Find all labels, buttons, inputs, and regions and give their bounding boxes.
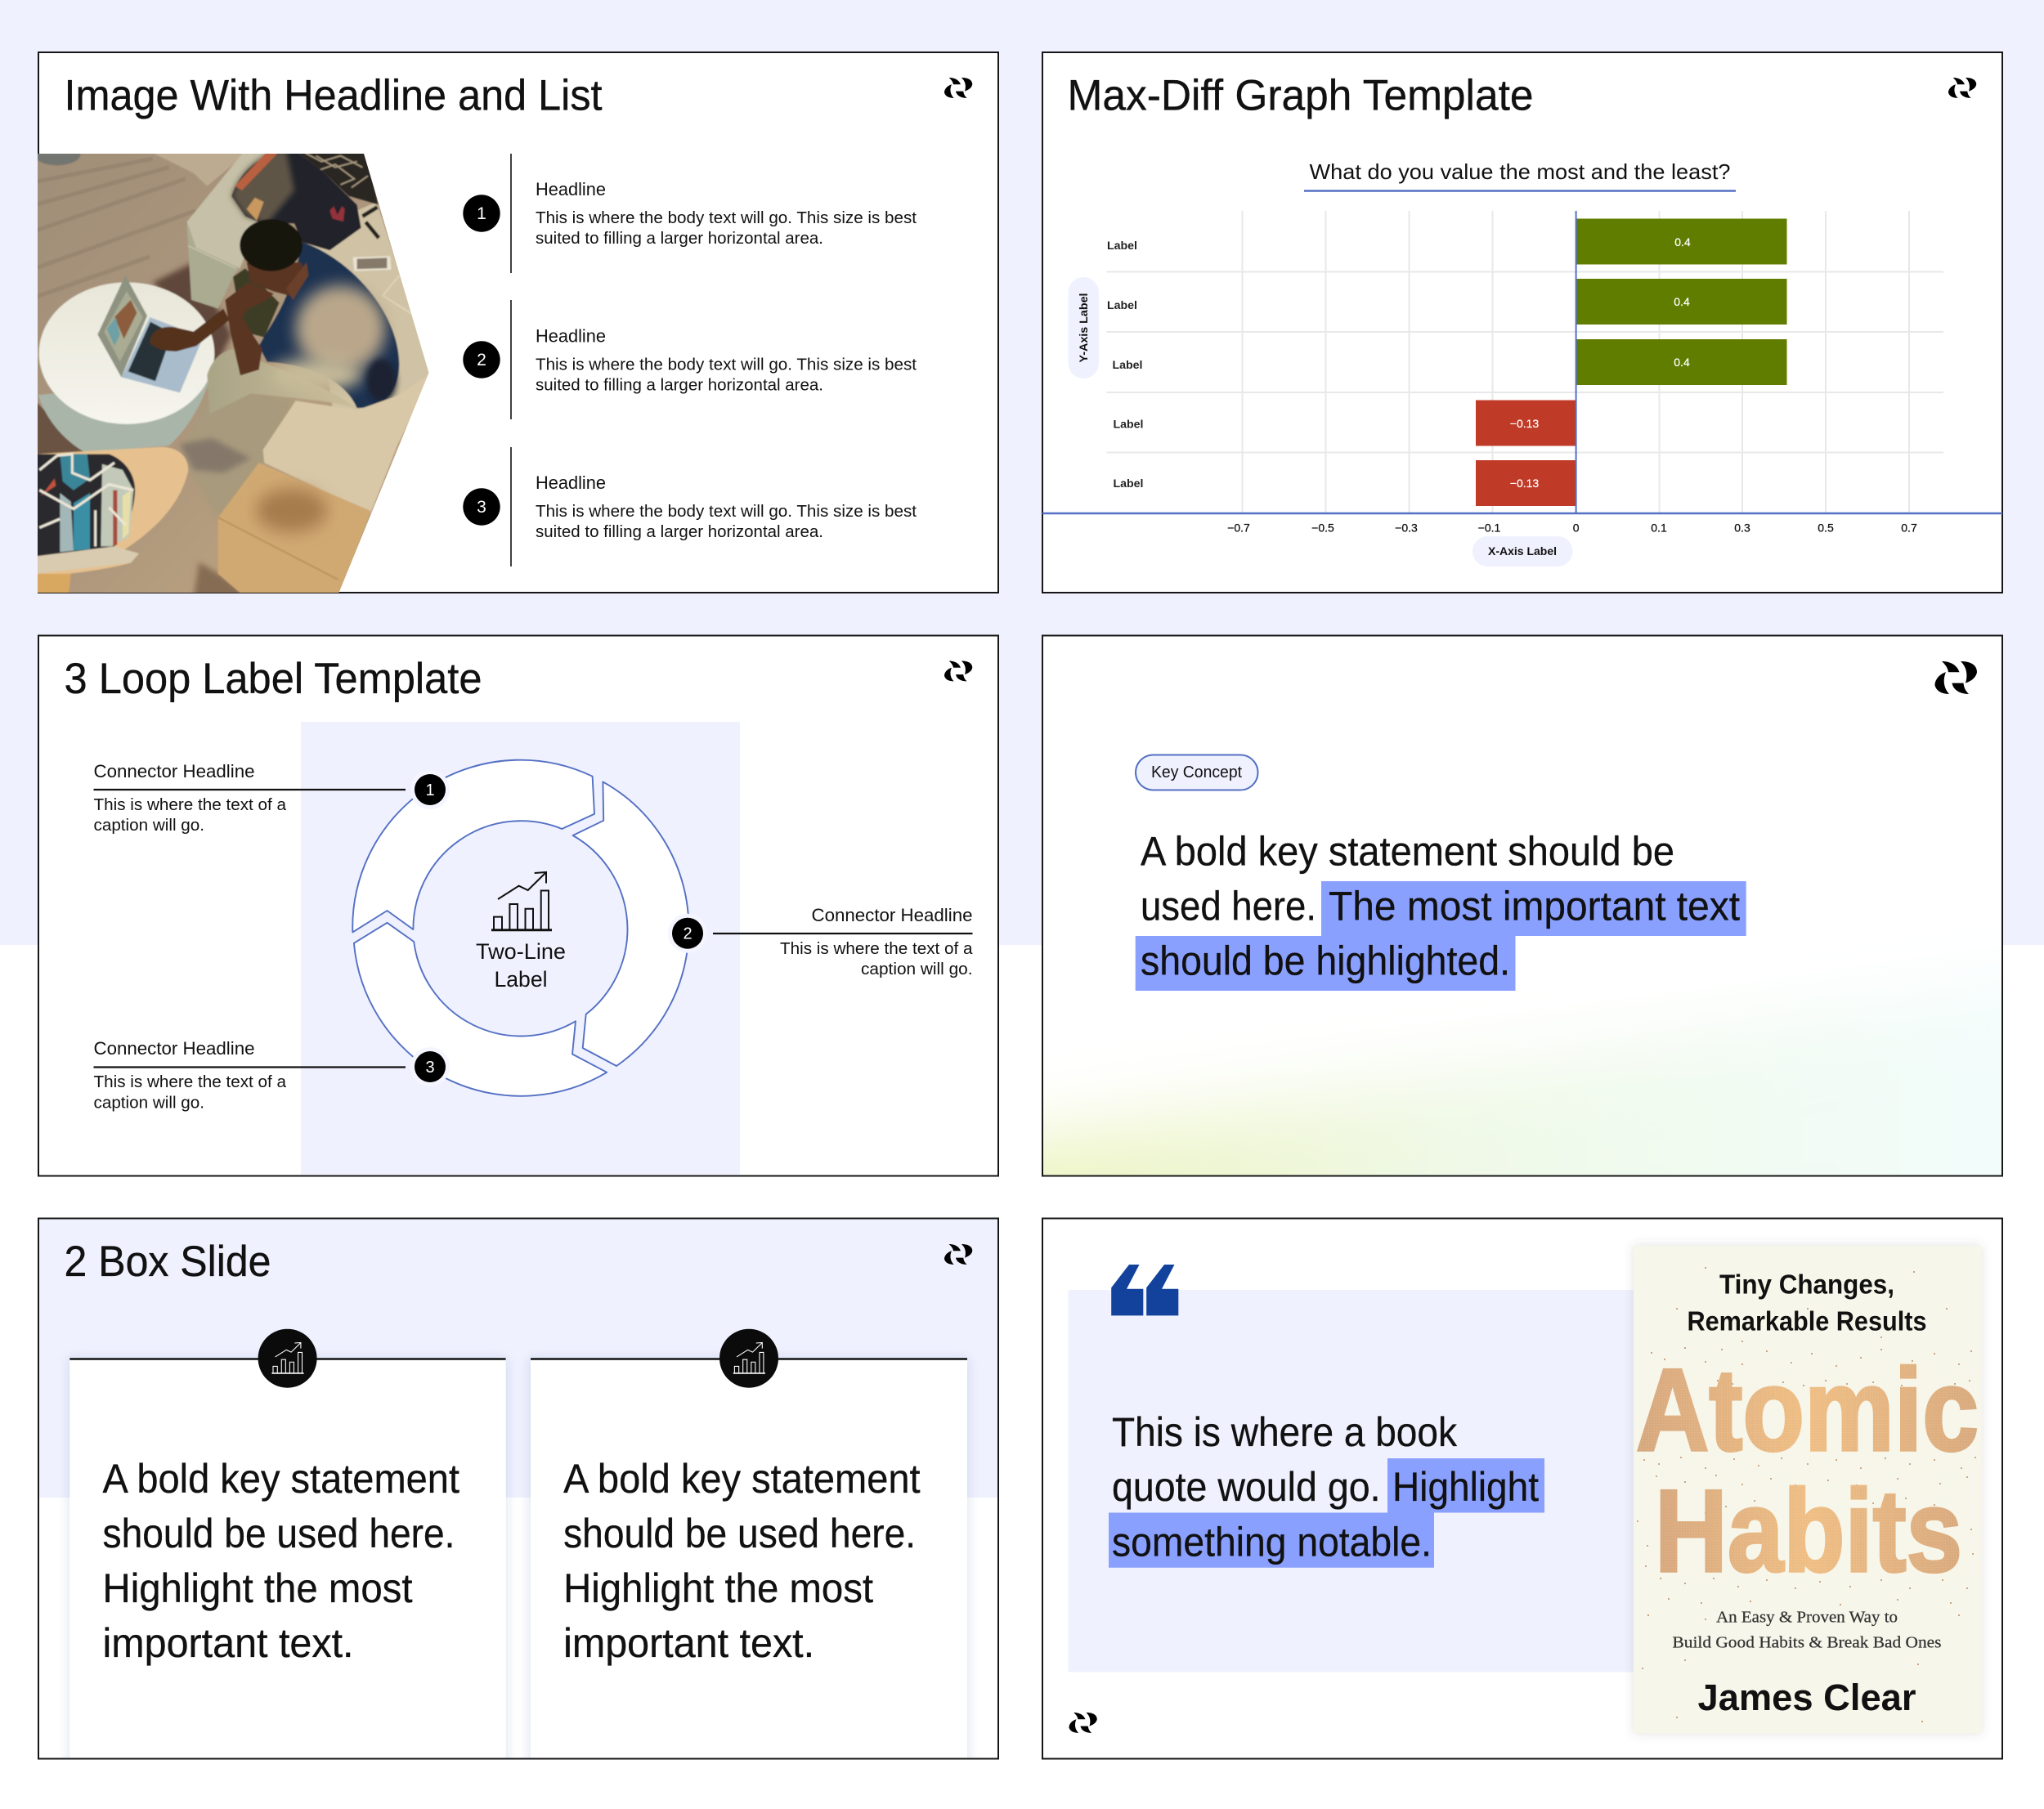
cover subtitle: An Easy & Proven Way to [1716,1609,1898,1627]
x axis ticks: 0.3 [1734,522,1750,535]
cover title: Atomic [1636,1346,1979,1475]
title: 2 Box Slide [64,1238,271,1286]
value labels: 0.4 [1674,235,1691,249]
icon: chart badge [719,1329,778,1388]
category labels: Label [1114,419,1143,430]
card text: should be used here. [103,1511,455,1556]
card 2 [531,1329,967,1784]
bars positive [1576,219,1787,385]
photo: man on laptop [38,154,428,593]
center label: Two-Line [476,939,566,964]
connector caption 3: caption will go. [93,1094,204,1112]
gradient wash [1043,999,2001,1175]
card text: A bold key statement [563,1456,921,1502]
list item 1: suited to filling a larger horizontal area. [536,230,823,248]
cover title: Habits [1655,1466,1962,1596]
marker 1: 1 [425,781,435,799]
x axis ticks: 0.1 [1651,522,1667,535]
title: Max-Diff Graph Template [1068,72,1534,119]
list item 3: suited to filling a larger horizontal area. [536,523,823,541]
quote backdrop [1069,1290,1634,1672]
card 1 [69,1329,506,1784]
center icon: chart [491,872,552,930]
chart question: What do you value the most and the least? [1310,159,1730,184]
card text: Highlight the most [563,1565,873,1611]
list item 3 [463,447,917,566]
x axis ticks: −0.1 [1478,522,1501,535]
value labels: 0.4 [1674,295,1690,308]
marker 1 [410,770,450,809]
marker 2: 2 [683,925,693,943]
statement: should be highlighted. [1141,938,1510,984]
list item 3: This is where the body text will go. This size is best [536,503,917,521]
loop segment 2 [573,781,688,1066]
card text: Highlight the most [103,1565,413,1611]
highlight [1136,881,1746,991]
statement: used here. [1141,883,1316,929]
category labels [1107,240,1143,490]
value labels: −0.13 [1510,477,1539,490]
dot-grid overlay on title [1635,1361,1979,1578]
lavender backdrop [301,722,740,1175]
center label [476,939,566,992]
connector caption 1: caption will go. [93,817,204,835]
panel: image with headline and list [30,52,998,600]
list item 1: Headline [536,179,606,199]
card text: important text. [563,1620,814,1666]
y axis label [1068,277,1099,378]
card text: important text. [103,1620,353,1666]
cards [69,1329,967,1784]
category labels: Label [1107,240,1137,252]
statement [1136,829,1746,991]
value labels [1510,235,1691,490]
connector caption 1: Connector Headline [93,761,255,781]
icon: logo [1069,1713,1097,1733]
x axis ticks: 0 [1573,522,1580,535]
icon: quote mark [1111,1265,1178,1315]
category labels: Label [1107,299,1137,311]
highlight [1109,1458,1544,1568]
x axis ticks [1227,522,1917,535]
panel: key concept [1042,634,2003,1177]
connector caption 2: This is where the text of a [780,940,973,958]
list item 2: Headline [536,325,606,347]
statement: The most important text [1329,883,1740,929]
x axis ticks: −0.3 [1395,522,1418,535]
panel: 3 loop label [38,636,998,1175]
cover subtitle [1673,1609,1942,1652]
category labels: Label [1114,477,1143,490]
connector caption 2: Connector Headline [811,905,973,925]
list item 2 [463,300,917,419]
center label: Label [494,967,548,992]
connector caption 3: Connector Headline [93,1038,255,1059]
x axis ticks: 0.5 [1818,522,1834,535]
bar chart [1042,211,2002,535]
quote text [1109,1409,1544,1568]
value labels: −0.13 [1510,417,1539,430]
icon: logo [1948,78,1976,98]
lavender header band [38,1218,998,1498]
x axis ticks: −0.5 [1311,522,1334,535]
cover subtitle: Build Good Habits & Break Bad Ones [1673,1634,1942,1652]
cover title [1636,1346,1979,1596]
card text: should be used here. [563,1511,916,1556]
loop diagram [352,760,688,1096]
bars negative [1476,401,1576,506]
statement: A bold key statement should be [1141,829,1674,875]
connector caption 1 [93,761,406,835]
icon: logo large [1934,661,1977,694]
marker 3: 3 [425,1059,435,1077]
scattered dots [1637,1267,1976,1722]
icon: chart badge [258,1329,317,1388]
connector caption 3 [93,1038,406,1112]
list item 3: Headline [536,472,606,493]
x axis label: X-Axis Label [1488,544,1557,557]
icon: logo [944,78,972,98]
x axis ticks: −0.7 [1227,522,1250,535]
quote text: something notable. [1112,1519,1432,1565]
x axis ticks: 0.7 [1901,522,1917,535]
cover tagline: Remarkable Results [1688,1306,1926,1337]
tag: key concept [1136,755,1257,790]
list item 1 [463,154,917,273]
cover tagline [1688,1269,1926,1337]
loop segment 1 [352,760,594,932]
card text: A bold key statement [103,1456,459,1502]
icon: logo [944,1244,972,1265]
value labels: 0.4 [1674,356,1690,369]
list item 2: suited to filling a larger horizontal area. [536,376,823,394]
card text [563,1456,921,1666]
quote text: Highlight [1392,1464,1539,1510]
category labels: Label [1112,359,1143,371]
tag: key concept: Key Concept [1151,763,1242,781]
panel: 2 box slide [38,1218,998,1784]
loop segment 3 [354,923,607,1096]
icon: logo [944,660,972,681]
list item 3: 3 [477,498,486,517]
panel: max-diff graph [1042,52,2002,593]
connector caption 3: This is where the text of a [93,1073,287,1091]
x axis label [1472,536,1573,566]
list item 1: This is where the body text will go. This size is best [536,209,917,227]
y axis label: Y-Axis Label [1078,293,1090,363]
quote text: This is where a book [1112,1409,1458,1455]
cover tagline: Tiny Changes, [1719,1269,1894,1300]
connector caption 2: caption will go. [861,960,973,978]
connector caption 2 [713,905,973,978]
book cover [1634,1246,1982,1733]
list item 1: 1 [477,204,486,223]
marker 2 [668,914,707,953]
marker 3 [410,1047,450,1086]
list item 2: This is where the body text will go. This size is best [536,356,917,374]
list item 2: 2 [477,351,486,369]
quote text: quote would go. [1112,1464,1380,1510]
panel: book quote [1042,1218,2002,1759]
card text [103,1456,459,1666]
title: 3 Loop Label Template [64,655,482,703]
connector caption 1: This is where the text of a [93,796,287,814]
arms [150,308,230,352]
cover author: James Clear [1697,1677,1916,1718]
title: Image With Headline and List [64,72,603,119]
